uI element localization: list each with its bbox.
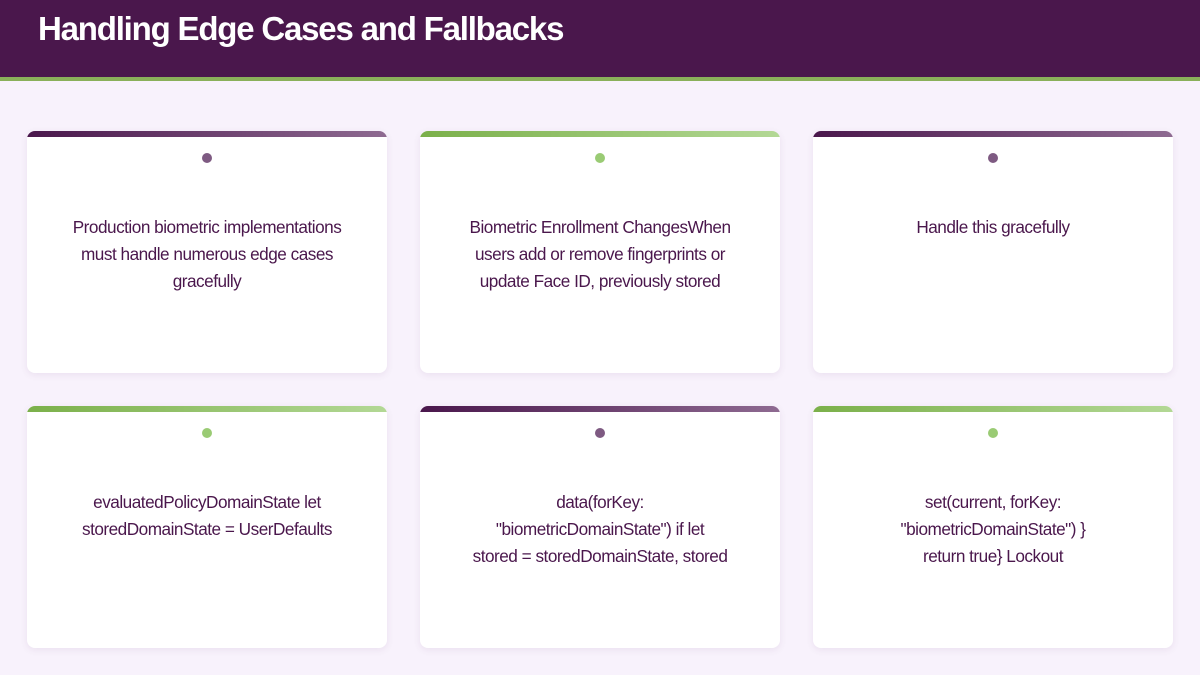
card 5 [420, 406, 780, 648]
card 2 text [469, 217, 731, 291]
card 2 [420, 131, 780, 373]
card 3 text: Handle this gracefully [916, 217, 1070, 237]
card 1 [27, 131, 387, 373]
card 4 text: storedDomainState = UserDefaults [82, 519, 332, 539]
card 1 text: must handle numerous edge cases [81, 244, 333, 264]
card 2 text: users add or remove fingerprints or [475, 244, 725, 264]
card 1 text: gracefully [173, 271, 241, 291]
card 6 text: return true} Lockout [923, 546, 1063, 566]
card 6 text: set(current, forKey: [925, 492, 1061, 512]
card 3 [813, 131, 1173, 373]
title: Handling Edge Cases and Fallbacks [38, 10, 563, 47]
card 5 text: data(forKey: [556, 492, 644, 512]
card 4 text: evaluatedPolicyDomainState let [93, 492, 321, 512]
card 5 text: stored = storedDomainState, stored [473, 546, 727, 566]
card 6 [813, 406, 1173, 648]
card 6 text: "biometricDomainState") } [900, 519, 1086, 539]
card 4 [27, 406, 387, 648]
card 1 text: Production biometric implementations [73, 217, 341, 237]
header [0, 0, 1200, 81]
card 5 text [473, 492, 727, 566]
card 6 text [900, 492, 1086, 566]
card 5 text: "biometricDomainState") if let [496, 519, 704, 539]
card 2 text: update Face ID, previously stored [480, 271, 720, 291]
card 1 text [73, 217, 342, 291]
card 4 text [82, 492, 332, 539]
card 2 text: Biometric Enrollment ChangesWhen [469, 217, 731, 237]
